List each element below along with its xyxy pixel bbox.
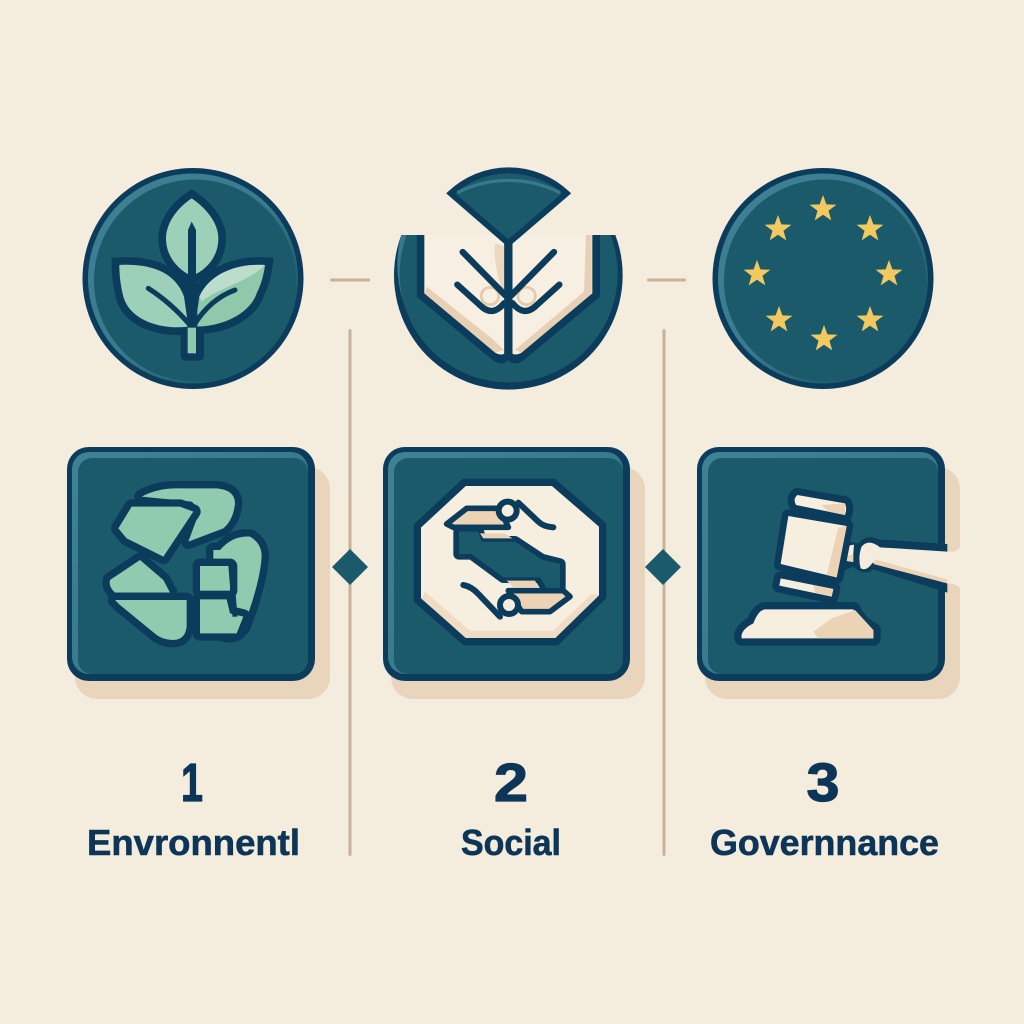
label: pillar 1 number: 1 [181,753,203,813]
sub: handle [837,537,947,593]
sub: cream palms [425,235,592,353]
connector: top left dash [330,278,370,282]
panel: gavel card [697,447,970,699]
sub: fingers [457,243,559,354]
sub: fan top [451,170,567,243]
sub: head [845,545,854,562]
icon: EU stars circle [712,168,934,389]
panel: recycle card [67,447,330,699]
label: Governance: Governnance [710,822,939,863]
sub: lower bowl [394,235,623,390]
label: pillar 2 number: 2 [494,753,528,813]
panel: handshake card [383,447,645,699]
icon: handshake octagon [417,482,603,642]
arrow: left diamond [332,549,368,585]
label: Social: Social [461,822,561,863]
divider: right vertical line [662,329,666,856]
label: pillar 3 number: 3 [806,753,840,813]
icon: recycle symbol [110,488,262,640]
icon: hands in circle [394,170,623,390]
sub: base [741,609,873,638]
connector: top right dash [647,278,686,282]
divider: left vertical line [348,329,352,856]
label: Environmental: Envronnentl [87,822,300,863]
arrow: right diamond [645,549,681,585]
icon: plant in circle [82,168,304,389]
icon: gavel [741,495,970,638]
